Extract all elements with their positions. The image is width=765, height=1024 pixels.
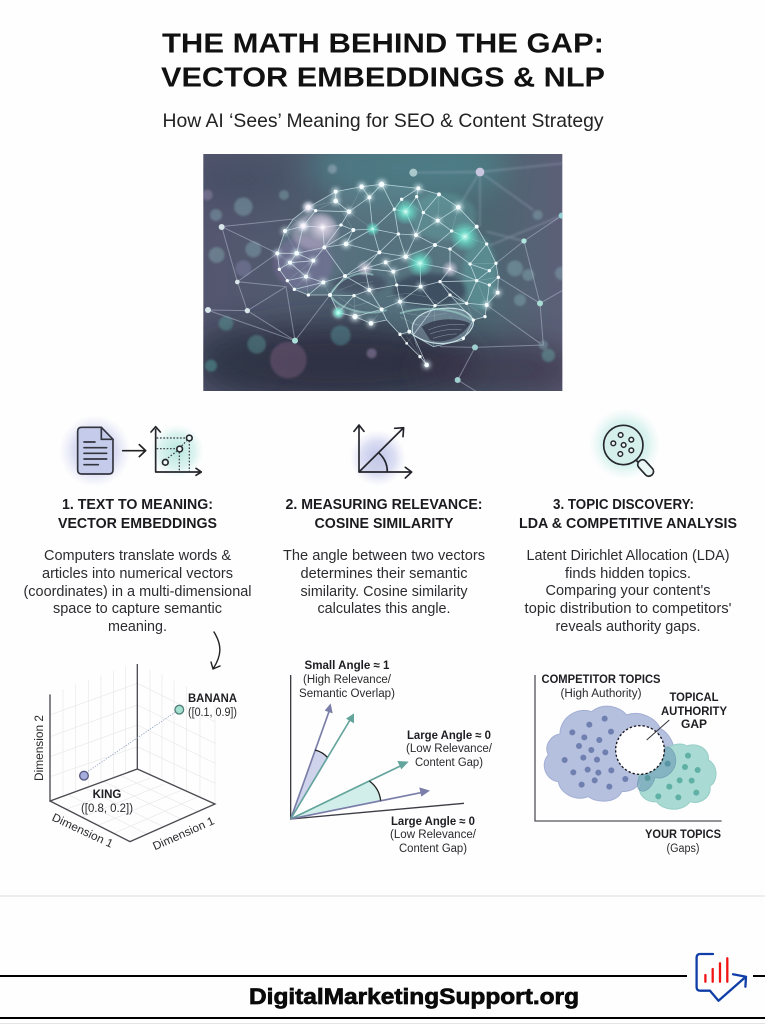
text block: vector embeddings: space to capture semantic (53, 600, 222, 617)
label: large angle lower: (Low Relevance/ (390, 829, 477, 841)
label: small angle: Small Angle ≈ 1 (304, 660, 390, 672)
brain mesh (277, 184, 498, 365)
text block: cosine similarity (283, 547, 485, 617)
text block: vector embeddings: articles into numerical vectors (42, 565, 233, 582)
heading: measuring relevance: COSINE SIMILARITY (314, 516, 454, 532)
icon: angle between vectors (350, 425, 412, 486)
arrow: curved pointer (211, 632, 220, 669)
title: VECTOR EMBEDDINGS & NLP (161, 62, 605, 92)
brain highlights (309, 213, 336, 241)
footer brand name: DigitalMarketingSupport.org (249, 984, 579, 1009)
label: competitor topics (542, 674, 661, 700)
cloud: your topics (638, 744, 716, 809)
label: your topics (645, 829, 721, 855)
heading: measuring relevance: 2. MEASURING RELEVANCE: (286, 497, 482, 513)
label: king: KING (93, 789, 121, 801)
label: topical authority gap: TOPICAL (670, 692, 718, 704)
chart: cosine similarity vectors (291, 660, 493, 855)
label: your topics: YOUR TOPICS (645, 829, 721, 841)
label: topical authority gap: GAP (681, 719, 707, 731)
background network lines (413, 163, 563, 247)
label: banana (188, 693, 237, 719)
label: small angle: Semantic Overlap) (299, 688, 395, 700)
label: dimension 1 left axis: Dimension 1 (50, 812, 115, 851)
label: large angle upper: Large Angle ≈ 0 (407, 730, 491, 742)
icon: logo chart bubble (697, 954, 746, 1001)
title (161, 28, 605, 92)
text block: LDA: Latent Dirichlet Allocation (LDA) (526, 547, 730, 564)
label: dimension 1 right axis: Dimension 1 (151, 815, 216, 853)
heading: text to meaning: 1. TEXT TO MEANING: (62, 497, 213, 513)
heading: topic discovery: 3. TOPIC DISCOVERY: (553, 497, 694, 513)
brain nodes (275, 182, 500, 367)
heading: measuring relevance (286, 497, 482, 532)
vector pair: small angle (291, 703, 354, 819)
cloud: competitor topics (544, 706, 675, 801)
arrow (123, 445, 146, 457)
text block: LDA: topic distribution to competitors' (524, 600, 732, 617)
topical authority gap (616, 726, 664, 774)
text block: cosine similarity: determines their semantic (300, 565, 468, 582)
brain body fill (277, 184, 498, 347)
heading: text to meaning: VECTOR EMBEDDINGS (58, 516, 217, 532)
label: large angle lower: Content Gap) (399, 843, 467, 855)
chart: topic cloud comparison (535, 674, 727, 855)
text block: LDA: finds hidden topics. (565, 565, 691, 582)
bokeh circles (202, 164, 568, 378)
icon: document to vector chart (59, 415, 204, 487)
label: banana: ([0.1, 0.9]) (188, 707, 237, 719)
label: large angle upper (406, 730, 493, 769)
label: large angle lower: Large Angle ≈ 0 (391, 816, 475, 828)
label: dimension 2 axis: Dimension 2 (34, 715, 46, 781)
text block: vector embeddings: meaning. (108, 618, 167, 635)
label: king (81, 789, 133, 815)
label: competitor topics: COMPETITOR TOPICS (542, 674, 661, 686)
label: small angle (299, 660, 395, 700)
cerebellum (412, 308, 473, 343)
label: small angle: (High Relevance/ (303, 674, 392, 686)
heading: text to meaning (58, 497, 217, 532)
label: banana: BANANA (188, 693, 237, 705)
text block: LDA: reveals authority gaps. (556, 618, 700, 635)
heading: topic discovery (519, 497, 737, 532)
footer (0, 954, 765, 1024)
label: king: ([0.8, 0.2]) (81, 803, 133, 815)
background nodes (205, 168, 565, 383)
text block: vector embeddings (24, 547, 252, 635)
text block: LDA (524, 547, 732, 635)
text block: LDA: Comparing your content's (546, 582, 710, 599)
subtitle: How AI ‘Sees’ Meaning for SEO & Content Strategy (162, 110, 604, 132)
icon: document (78, 427, 113, 474)
label: large angle upper: (Low Relevance/ (406, 743, 493, 755)
text block: vector embeddings: Computers translate words & (44, 547, 231, 564)
label: competitor topics: (High Authority) (560, 688, 642, 700)
text block: cosine similarity: The angle between two vectors (283, 547, 485, 564)
label: large angle lower (390, 816, 477, 855)
chart axes (151, 427, 201, 475)
title: THE MATH BEHIND THE GAP: (162, 28, 604, 58)
point: king (80, 771, 88, 780)
chart: 3D vector space (34, 664, 237, 853)
text block: vector embeddings: (coordinates) in a multi-dimensional (24, 583, 252, 600)
overlap region (637, 747, 676, 791)
label: topical authority gap (661, 692, 727, 731)
brain fine mesh (277, 184, 498, 365)
label: large angle upper: Content Gap) (415, 757, 483, 769)
hero image: glowing neural network brain (203, 154, 562, 391)
vector pair: large angle (291, 761, 430, 819)
label: your topics: (Gaps) (666, 843, 700, 855)
icon: magnifying glass over topics (589, 408, 661, 480)
text block: cosine similarity: similarity. Cosine similarity (300, 583, 468, 600)
label: topical authority gap: AUTHORITY (661, 706, 727, 718)
brain nodes glow (274, 180, 501, 369)
point: banana (175, 705, 184, 714)
heading: topic discovery: LDA & COMPETITIVE ANALYSIS (519, 516, 737, 532)
text block: cosine similarity: calculates this angle. (318, 600, 450, 617)
